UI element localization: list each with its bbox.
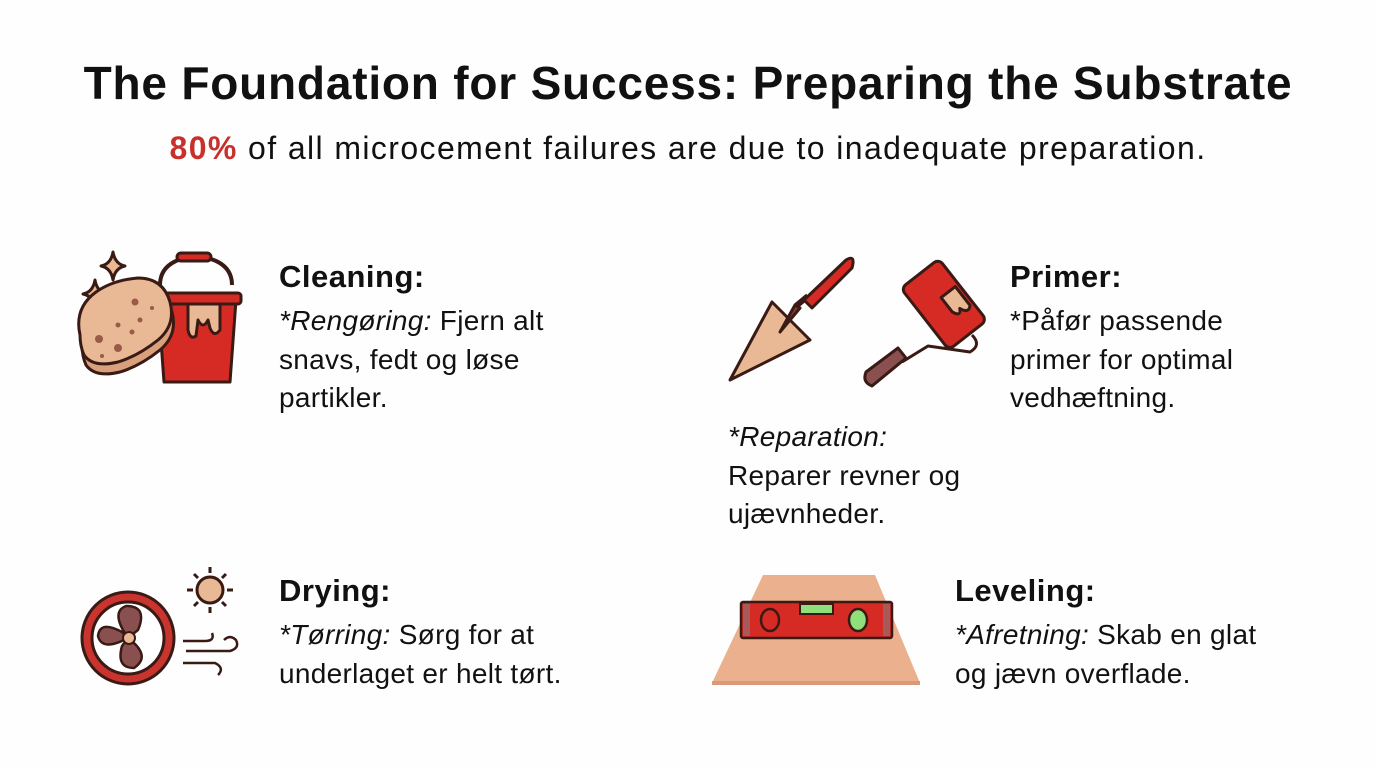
text: leveling: *Afretning: Skab en glat: [955, 619, 1256, 650]
text: drying: *Tørring: Sørg for at: [279, 619, 534, 650]
text: drying: [279, 573, 562, 689]
text: reparation: *Reparation:: [728, 421, 887, 452]
title: The Foundation for Success: Preparing the Substrate: [84, 57, 1292, 109]
text: reparation: [728, 421, 960, 529]
icon: trowel: [730, 258, 853, 380]
text: primer: [1010, 259, 1233, 413]
text: leveling: [955, 573, 1256, 689]
text: cleaning: *Rengøring: Fjern alt: [279, 305, 544, 336]
text: reparation: ujævnheder.: [728, 498, 885, 529]
text: primer: vedhæftning.: [1010, 382, 1176, 413]
text: cleaning: [279, 259, 544, 413]
text: primer: primer for optimal: [1010, 344, 1233, 374]
text: leveling: Leveling:: [955, 573, 1096, 608]
text: drying: Drying:: [279, 573, 391, 608]
icon: fan sun wind: [82, 567, 237, 684]
text: cleaning: snavs, fedt og løse: [279, 344, 520, 374]
text: reparation: Reparer revner og: [728, 460, 960, 490]
text: primer: *Påfør passende: [1010, 305, 1223, 336]
icon: sponge and bucket: [79, 252, 241, 382]
subtitle: 80% of all microcement failures are due to inadequate preparation.: [170, 130, 1206, 166]
text: cleaning: partikler.: [279, 382, 388, 413]
text: leveling: og jævn overflade.: [955, 658, 1191, 688]
text: cleaning: Cleaning:: [279, 259, 425, 294]
text: primer: Primer:: [1010, 259, 1122, 294]
text: drying: underlaget er helt tørt.: [279, 658, 562, 688]
icon: spirit level: [712, 575, 920, 685]
icon: paint roller: [865, 259, 987, 386]
